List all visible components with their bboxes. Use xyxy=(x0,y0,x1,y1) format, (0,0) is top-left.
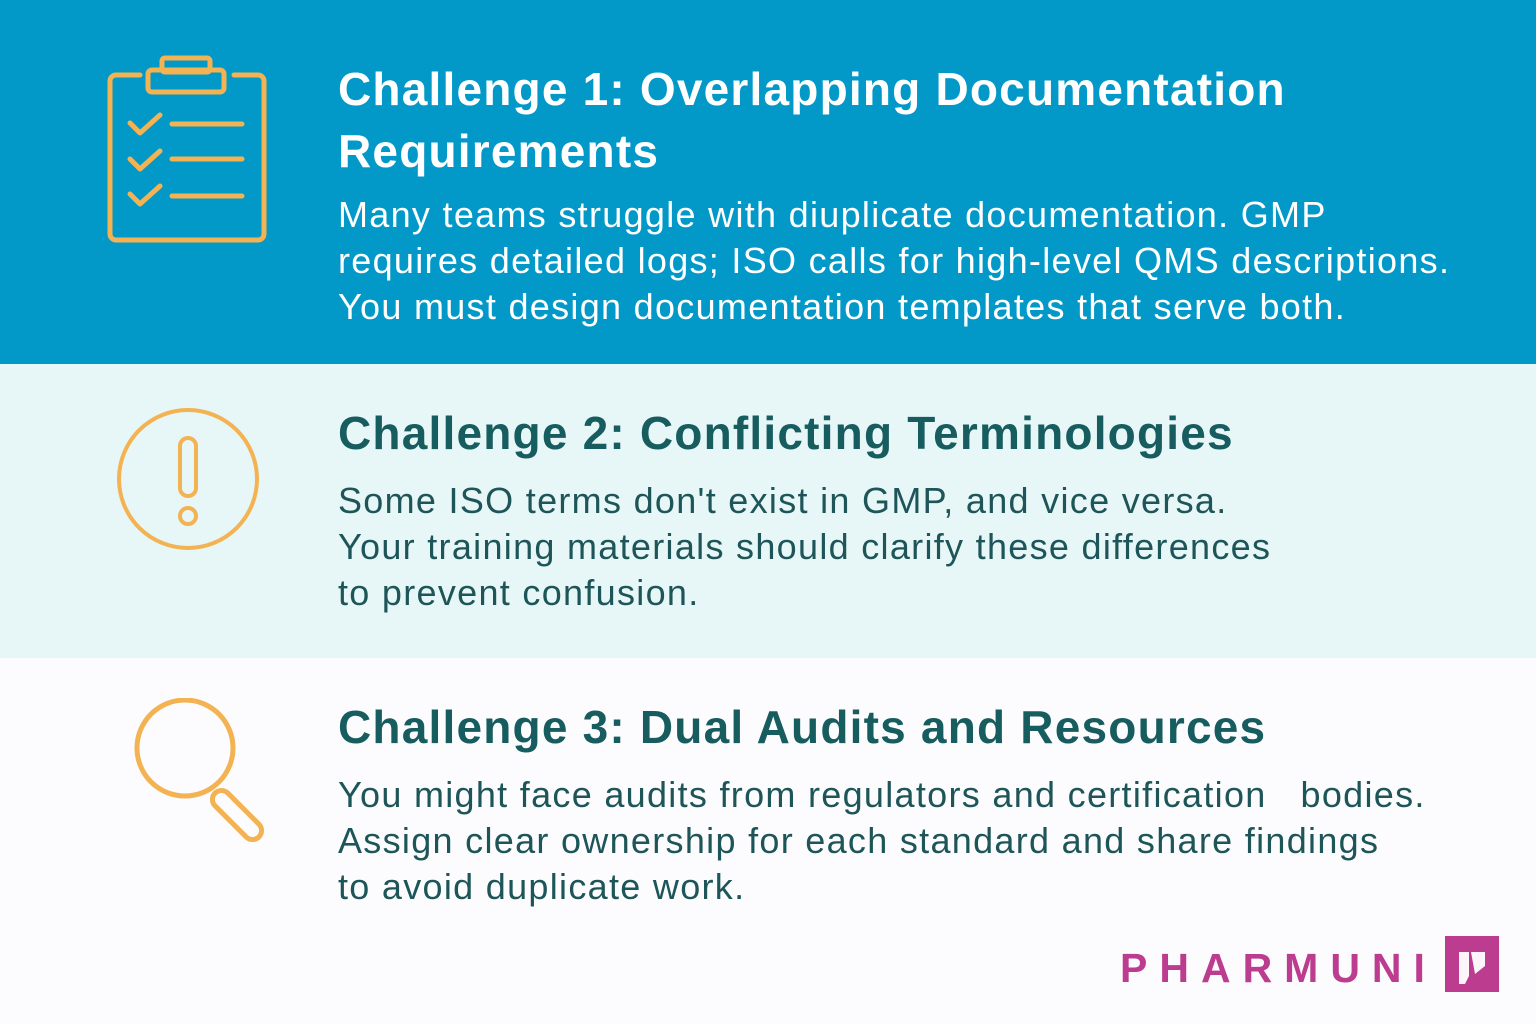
panel: challenge 1 xyxy=(0,0,1536,364)
text: challenge 1 body: You must design documentation templates that serve both. xyxy=(338,286,1346,327)
icon: exclamation xyxy=(117,408,259,550)
text: challenge 1 body xyxy=(338,194,1450,327)
text: challenge 1 body: Many teams struggle with diuplicate documentation. GMP xyxy=(338,194,1327,235)
icon: magnifier xyxy=(134,698,264,842)
panel: challenge 2 xyxy=(0,364,1536,658)
text: challenge 3 body: to avoid duplicate work. xyxy=(338,866,745,907)
icon: clipboard xyxy=(108,56,266,242)
heading: challenge 1: Challenge 1: Overlapping Documentation xyxy=(338,63,1286,115)
logo: PHARMUNI xyxy=(1120,936,1499,992)
panel: challenge 3 xyxy=(134,698,1426,907)
text: challenge 1 body: requires detailed logs; ISO calls for high-level QMS descriptions. xyxy=(338,240,1450,281)
text: challenge 2 body: Your training materials should clarify these differences xyxy=(338,526,1271,567)
heading: challenge 1 xyxy=(338,63,1286,177)
text: challenge 2 body: to prevent confusion. xyxy=(338,572,700,613)
heading: challenge 1: Requirements xyxy=(338,125,659,177)
text: challenge 3 body: Assign clear ownership for each standard and share findings xyxy=(338,820,1379,861)
heading: challenge 3: Challenge 3: Dual Audits and Resources xyxy=(338,701,1266,753)
heading: challenge 2: Challenge 2: Conflicting Terminologies xyxy=(338,407,1234,459)
text: challenge 2 body xyxy=(338,480,1271,613)
text: challenge 2 body: Some ISO terms don't exist in GMP, and vice versa. xyxy=(338,480,1228,521)
text: challenge 3 body xyxy=(338,774,1426,907)
text: challenge 3 body: You might face audits from regulators and certification bodies. xyxy=(338,774,1426,815)
logo: PHARMUNI: PHARMUNI xyxy=(1120,945,1437,991)
